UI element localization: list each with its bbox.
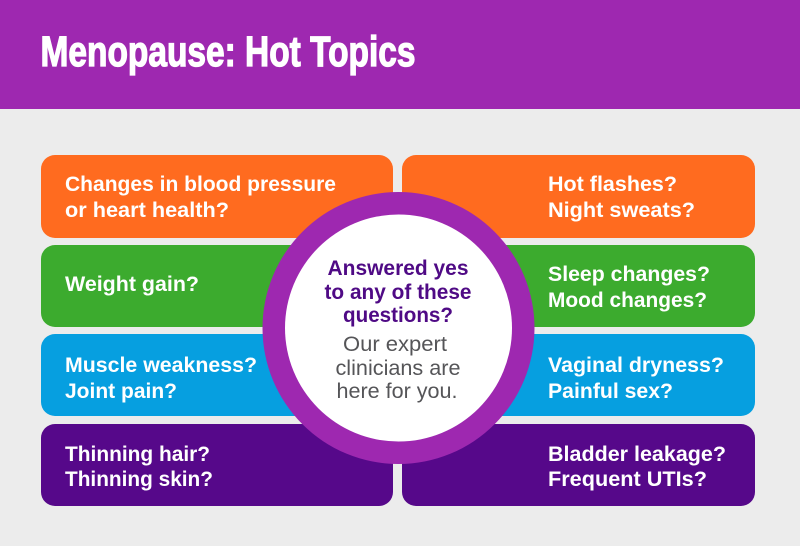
- callout question: questions?: [343, 304, 453, 327]
- panel: hot flashes: Hot flashes?: [548, 173, 677, 196]
- callout message: [336, 333, 460, 403]
- panel: blood pressure: [41, 155, 393, 238]
- panel: blood pressure: or heart health?: [65, 199, 229, 222]
- panel: thinning hair: [41, 424, 393, 506]
- panel: hot flashes: [402, 155, 755, 238]
- panel: bladder leakage: Bladder leakage?: [548, 443, 726, 466]
- callout question: [324, 257, 472, 327]
- panel: sleep changes: Mood changes?: [548, 289, 707, 312]
- title: Menopause: Hot Topics: [40, 28, 416, 76]
- panel: thinning hair: Thinning hair?: [65, 443, 210, 466]
- panel: vaginal dryness: Painful sex?: [548, 380, 673, 403]
- panel: thinning hair: Thinning skin?: [65, 468, 213, 491]
- panel: muscle weakness: Muscle weakness?: [65, 354, 257, 377]
- panel: vaginal dryness: [402, 334, 755, 416]
- panel: hot flashes: Night sweats?: [548, 199, 695, 222]
- panel: vaginal dryness: Vaginal dryness?: [548, 354, 724, 377]
- panel: bladder leakage: Frequent UTIs?: [548, 468, 707, 491]
- center circle callout: [262, 192, 534, 464]
- callout message: here for you.: [336, 380, 458, 403]
- panel: muscle weakness: Joint pain?: [65, 380, 177, 403]
- panel: muscle weakness: [41, 334, 393, 416]
- panel: weight gain: Weight gain?: [65, 273, 199, 296]
- panel: weight gain: [41, 245, 393, 327]
- panel: bladder leakage: [402, 424, 755, 506]
- callout message: clinicians are: [336, 357, 460, 380]
- callout message: Our expert: [343, 333, 447, 356]
- panel: sleep changes: Sleep changes?: [548, 263, 710, 286]
- callout question: Answered yes: [328, 257, 468, 280]
- header band: [0, 0, 800, 109]
- panel: blood pressure: Changes in blood pressure: [65, 173, 336, 196]
- panel: sleep changes: [402, 245, 755, 327]
- callout question: to any of these: [324, 281, 472, 304]
